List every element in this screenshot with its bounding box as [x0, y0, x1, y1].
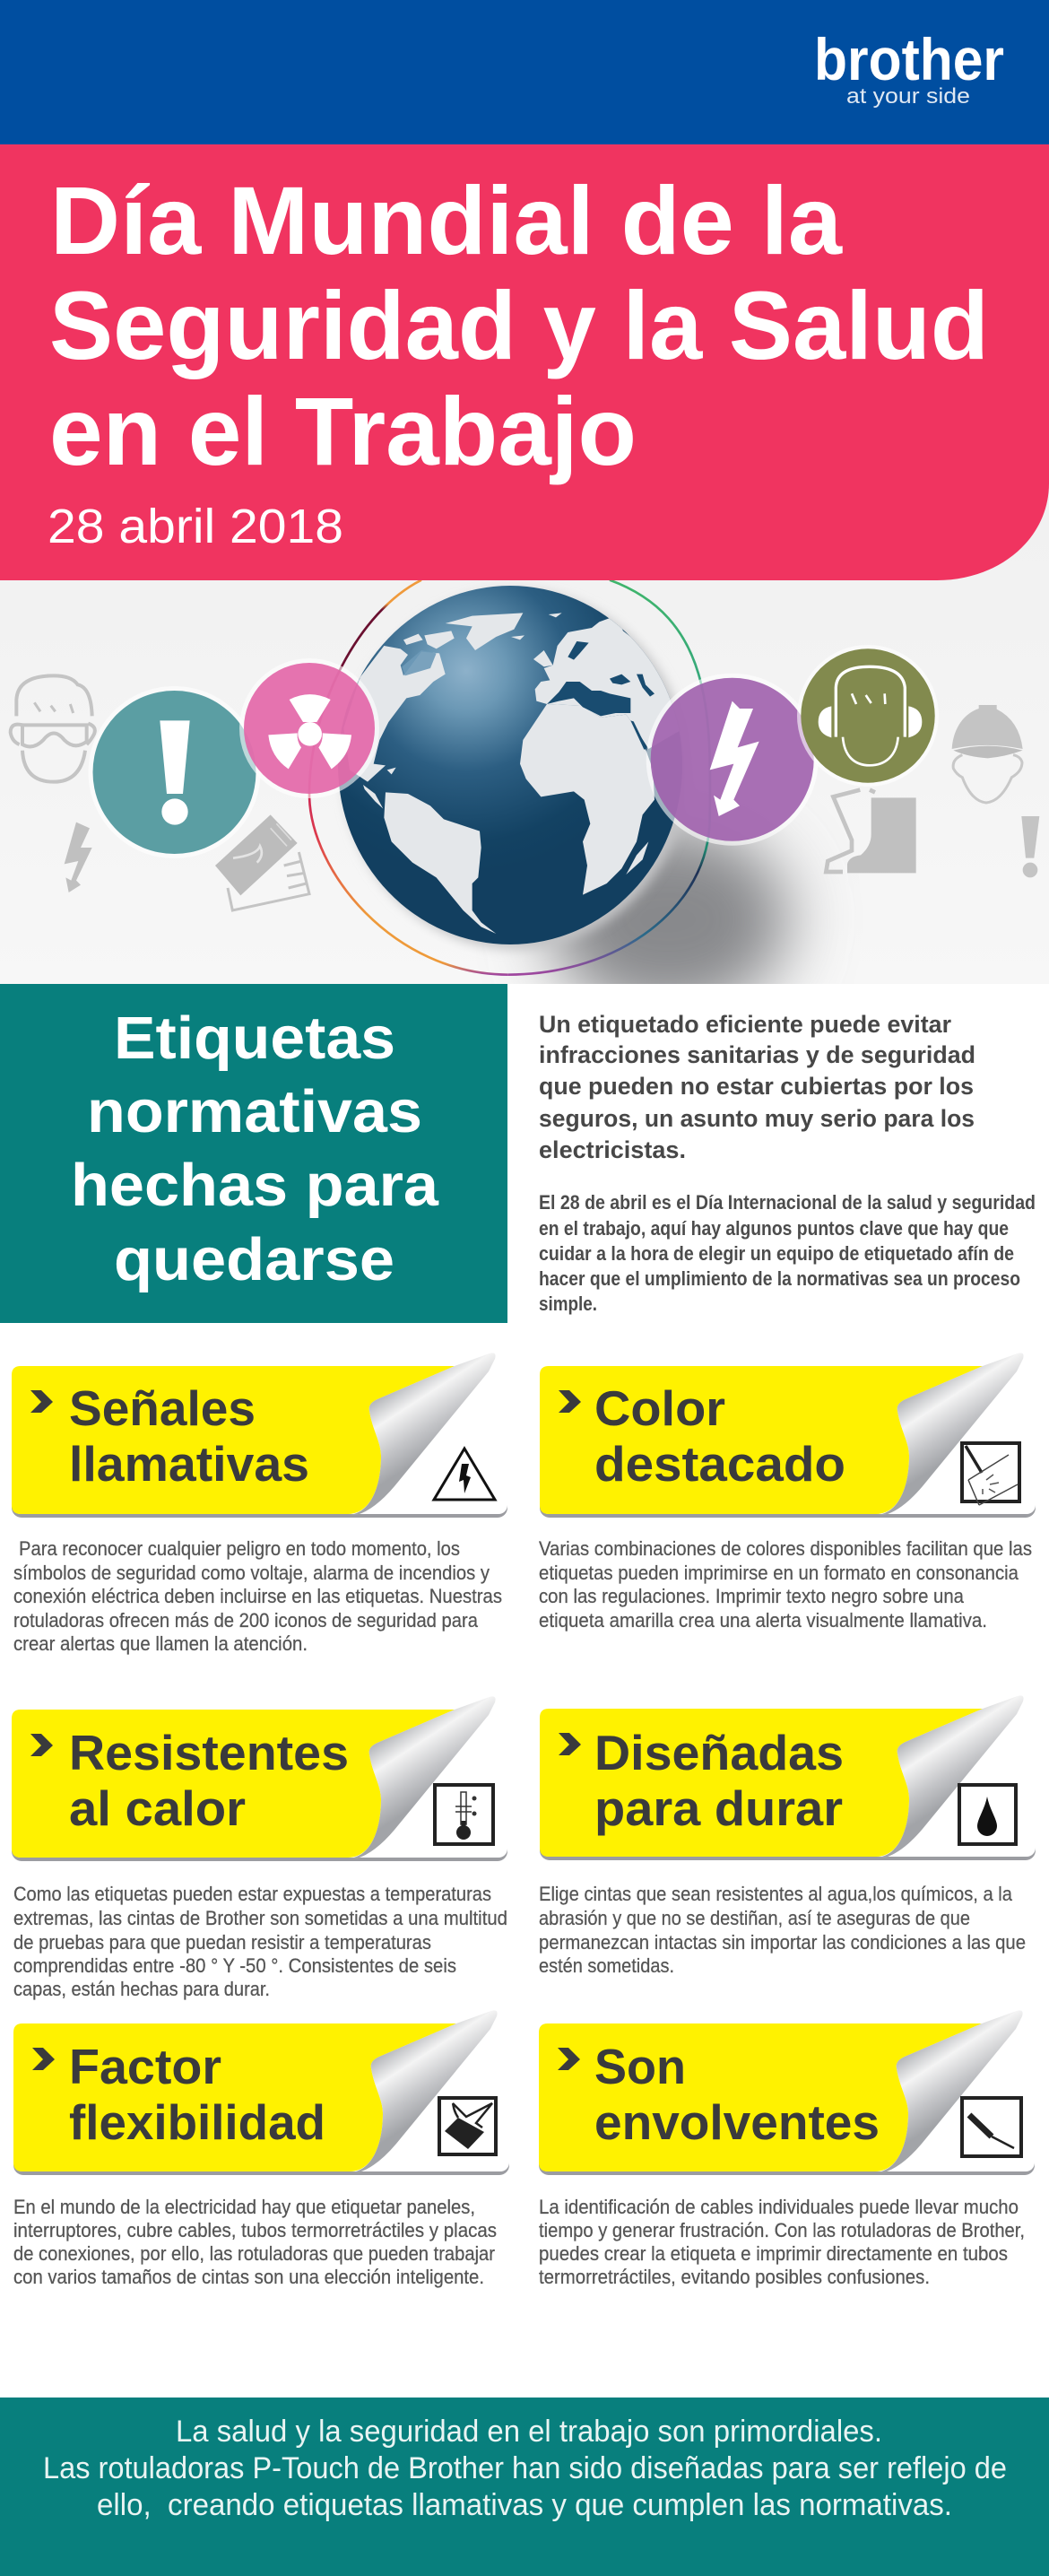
icon: water drop	[959, 1785, 1016, 1844]
panel: Resistentes al calor	[12, 1696, 507, 2000]
main title: Seguridad y la Salud	[49, 271, 989, 379]
body text: crear alertas que llamen la atención.	[13, 1632, 308, 1655]
icon: electric hazard triangle	[434, 1449, 495, 1500]
heading	[594, 2039, 880, 2150]
body text: estén sometidas.	[539, 1954, 674, 1977]
body text: abrasión y que no se destiñan, así te aseguras de que	[539, 1907, 970, 1929]
body text	[539, 1883, 1026, 1977]
body text	[539, 2196, 1025, 2288]
panel: Señales llamativas	[12, 1353, 507, 1655]
footer panel: teal	[0, 2398, 1049, 2576]
section heading: quedarse	[114, 1226, 394, 1293]
heading: Color	[594, 1380, 725, 1436]
body text: etiqueta amarilla crea una alerta visualmente llamativa.	[539, 1609, 987, 1632]
panel: Color destacado	[539, 1353, 1036, 1632]
footer text: La salud y la seguridad en el trabajo son primordiales.	[176, 2415, 882, 2449]
body text: La identificación de cables individuales puede llevar mucho	[539, 2196, 1019, 2218]
intro lead text	[539, 1011, 975, 1163]
body text: extremas, las cintas de Brother son sometidas a una multitud	[13, 1907, 507, 1929]
main title: en el Trabajo	[49, 377, 637, 485]
heading	[69, 2039, 325, 2150]
body text	[13, 2196, 497, 2288]
title panel: pink	[0, 144, 1049, 580]
label graphic	[12, 1353, 507, 1518]
intro lead text: electricistas.	[539, 1136, 686, 1163]
label graphic	[539, 2010, 1035, 2175]
section heading: hechas para	[71, 1152, 439, 1219]
hero illustration: globe and safety icons	[0, 490, 1049, 984]
intro lead text: Un etiquetado eficiente puede evitar	[539, 1011, 951, 1038]
grey icon: gloves and document	[215, 814, 309, 910]
main title: Día Mundial de la	[50, 166, 843, 274]
panel: Son envolventes	[539, 2010, 1035, 2288]
heading	[594, 1725, 844, 1836]
section heading	[71, 1005, 439, 1293]
heading	[69, 1725, 349, 1836]
heading: llamativas	[69, 1436, 309, 1492]
section heading: normativas	[87, 1078, 422, 1145]
heading: destacado	[594, 1436, 845, 1492]
pink radiation circle	[239, 658, 379, 798]
panel: teal heading	[0, 984, 507, 1323]
date: 28 abril 2018	[48, 500, 343, 553]
heading: al calor	[69, 1780, 246, 1836]
intro lead text: infracciones sanitarias y de seguridad	[539, 1041, 975, 1068]
olive ear protection circle	[797, 645, 939, 787]
intro secondary text: simple.	[539, 1292, 597, 1315]
panel: Diseñadas para durar	[539, 1695, 1036, 1977]
label graphic	[12, 1696, 507, 1861]
header bar: blue	[0, 0, 1049, 144]
grey icon: exclamation mark	[1021, 816, 1039, 877]
section heading: Etiquetas	[114, 1005, 395, 1072]
label graphic	[540, 1353, 1036, 1518]
label graphic	[13, 2010, 509, 2175]
heading: Factor	[69, 2039, 221, 2094]
body text: interruptores, cubre cables, tubos termorretráctiles y placas	[13, 2219, 497, 2241]
heading: para durar	[594, 1780, 843, 1836]
icon: cable	[962, 2098, 1021, 2156]
purple lightning circle	[646, 674, 819, 846]
body text: capas, están hechas para durar.	[13, 1978, 270, 2000]
footer text	[43, 2415, 1007, 2522]
body text: símbolos de seguridad como voltaje, alarma de incendios y	[13, 1562, 490, 1584]
main title	[49, 166, 989, 485]
grey icon: hard hat	[952, 705, 1023, 803]
grey icon: face with goggles	[11, 675, 95, 782]
icon: label in box	[962, 1443, 1019, 1505]
body text: Elige cintas que sean resistentes al agua,los químicos, a la	[539, 1883, 1013, 1905]
body text: Como las etiquetas pueden estar expuestas a temperaturas	[13, 1883, 491, 1905]
icon: thermometer	[435, 1785, 493, 1844]
grey icon: lightning bolt	[65, 822, 92, 892]
body text	[13, 1537, 502, 1655]
body text: con las regulaciones. Imprimir texto negro sobre una	[539, 1585, 965, 1607]
panel: Factor flexibilidad	[13, 2010, 509, 2288]
intro lead text: que pueden no estar cubiertas por los	[539, 1073, 974, 1100]
label graphic	[540, 1695, 1036, 1860]
teal exclamation circle	[93, 691, 256, 854]
heading: Resistentes	[69, 1725, 349, 1780]
body text: Para reconocer cualquier peligro en todo momento, los	[19, 1537, 460, 1560]
body text: etiquetas pueden imprimirse en un formato en consonancia	[539, 1562, 1019, 1584]
body text: con varios tamaños de cintas son una elección inteligente.	[13, 2266, 484, 2288]
body text: comprendidas entre -80 ° Y -50 °. Consistentes de seis	[13, 1954, 456, 1977]
body text: puedes crear la etiqueta e imprimir directamente en tubos	[539, 2242, 1008, 2265]
footer text: Las rotuladoras P-Touch de Brother han sido diseñadas para ser reflejo de	[43, 2451, 1007, 2485]
body text	[539, 1537, 1032, 1632]
footer text: ello, creando etiquetas llamativas y que cumplen las normativas.	[97, 2488, 952, 2522]
heading: Son	[594, 2039, 686, 2094]
globe shadow	[343, 590, 789, 1014]
globe	[338, 586, 684, 944]
heading	[69, 1380, 309, 1492]
body text: de conexiones, por ello, las rotuladoras que pueden trabajar	[13, 2242, 495, 2265]
grey icon: safety boots	[826, 790, 916, 873]
body text: de pruebas para que puedan resistir a temperaturas	[13, 1931, 431, 1954]
intro secondary text	[539, 1191, 1036, 1315]
intro lead text: seguros, un asunto muy serio para los	[539, 1105, 975, 1132]
body text: conexión eléctrica deben incluirse en las etiquetas. Nuestras	[13, 1585, 502, 1607]
logo: brother at your side: at your side	[846, 84, 970, 109]
heading	[594, 1380, 845, 1492]
heading: Señales	[69, 1380, 256, 1436]
multicolour ring	[309, 580, 710, 975]
heading: flexibilidad	[69, 2094, 325, 2150]
icon: flexible label	[439, 2098, 496, 2154]
heading: Diseñadas	[594, 1725, 844, 1780]
heading: envolventes	[594, 2094, 880, 2150]
logo: brother at your side: brother	[814, 26, 1004, 92]
body text: rotuladoras ofrecen más de 200 iconos de seguridad para	[13, 1609, 479, 1632]
body text	[13, 1883, 507, 2000]
body text: En el mundo de la electricidad hay que etiquetar paneles,	[13, 2196, 475, 2218]
body text: termorretráctiles, evitando posibles confusiones.	[539, 2266, 930, 2288]
